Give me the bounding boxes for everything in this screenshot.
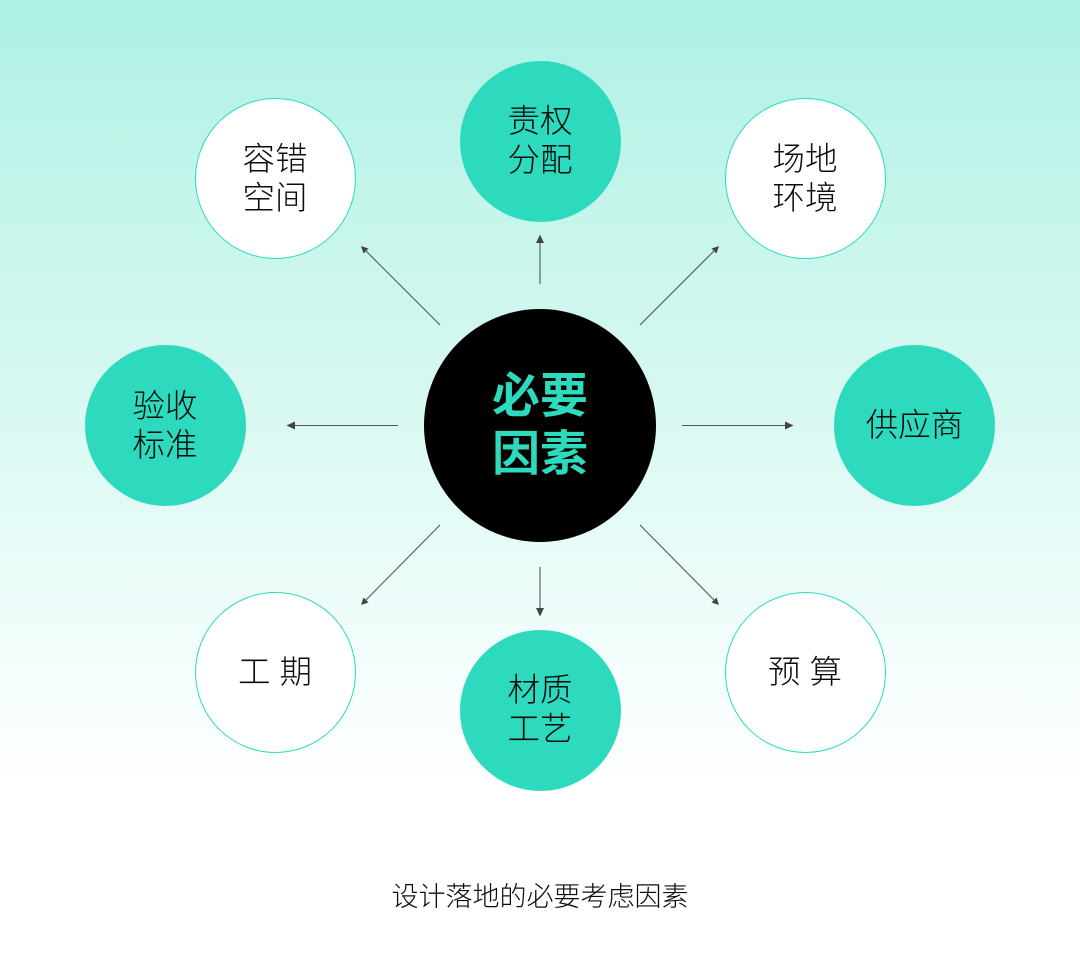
arrow: up right <box>640 246 719 325</box>
circle: 材质工艺 <box>460 630 620 790</box>
circle: 场地环境: 环境 <box>772 180 838 216</box>
circle: 容错空间: 空间 <box>242 180 308 216</box>
arrow: down left <box>361 525 440 605</box>
circle: 材质工艺: 材质 <box>507 672 572 708</box>
circle: 验收标准: 验收 <box>132 388 198 424</box>
circle: 供应商: 供应商 <box>866 407 963 443</box>
circle: 工期 <box>194 592 356 753</box>
arrow: down right <box>640 525 719 605</box>
circle: 责权分配: 分配 <box>507 142 572 178</box>
circle: 工期: 工 期 <box>238 654 312 690</box>
circle: 供应商 <box>834 345 995 506</box>
arrow: right <box>682 422 794 430</box>
circle: 责权分配 <box>460 60 620 222</box>
circle: 容错空间: 容错 <box>242 140 308 176</box>
circle: 验收标准 <box>84 345 246 506</box>
arrow: up <box>536 234 544 284</box>
centre circle: 必要因素 <box>424 309 656 542</box>
circle: 预算: 预 算 <box>768 654 842 690</box>
circle: 场地环境: 场地 <box>772 140 838 176</box>
arrow: left <box>286 422 398 430</box>
centre circle: 必要因素: 因素 <box>492 428 588 480</box>
circle: 责权分配: 责权 <box>507 103 572 139</box>
arrow: up left <box>361 246 440 325</box>
circle: 场地环境 <box>724 98 886 259</box>
circle: 容错空间 <box>194 98 356 259</box>
centre circle: 必要因素: 必要 <box>492 370 588 422</box>
caption: 设计落地的必要考虑因素 <box>392 882 688 912</box>
circle: 材质工艺: 工艺 <box>507 711 572 747</box>
circle: 预算 <box>724 592 886 753</box>
arrow: down <box>536 567 544 616</box>
circle: 验收标准: 标准 <box>132 426 198 462</box>
